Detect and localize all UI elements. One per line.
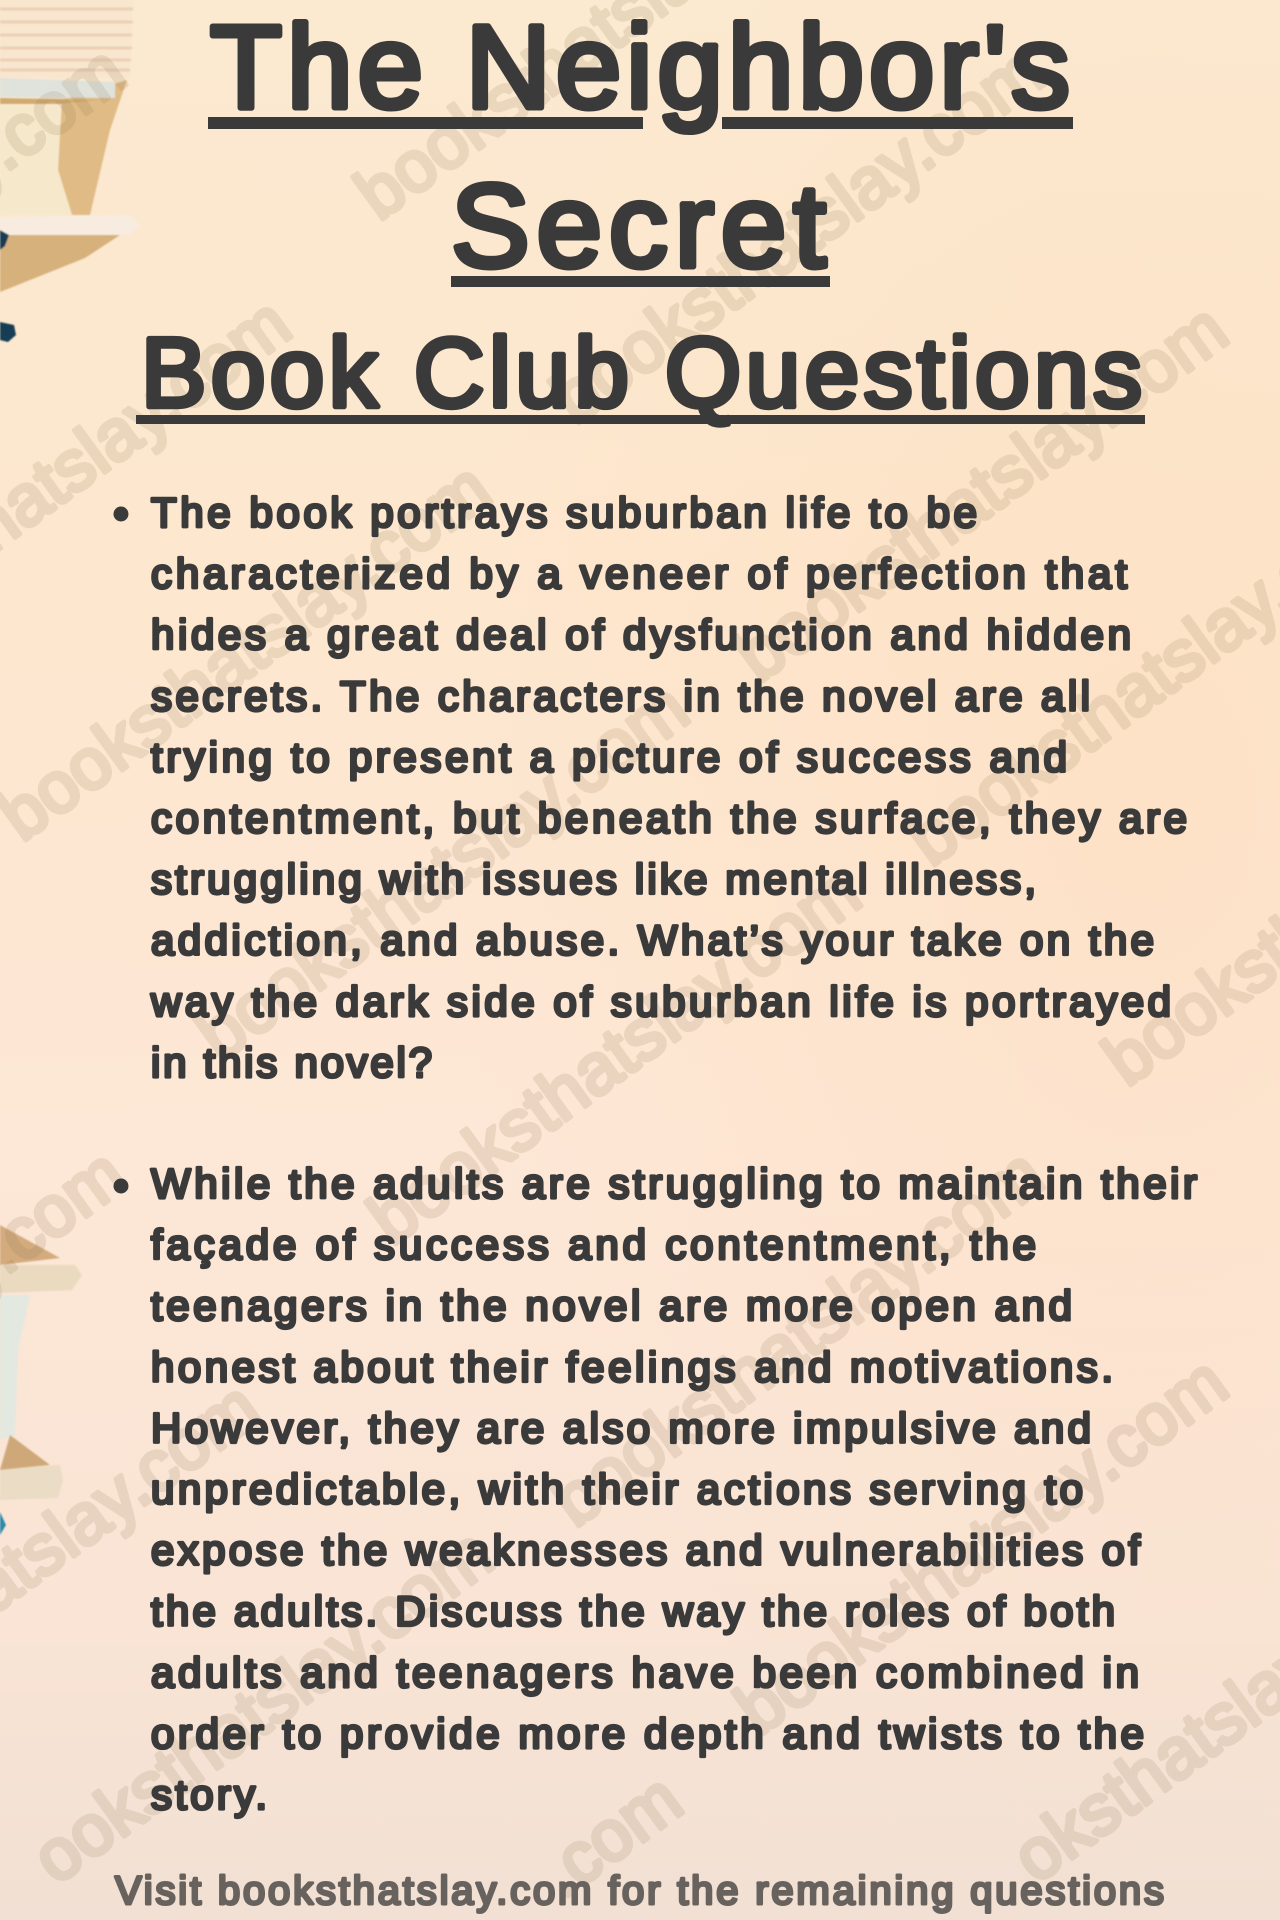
watermarks: booksthatslay.com (537, 1133, 1058, 1542)
question 2 text: unpredictable, with their actions serving to (151, 1466, 1083, 1512)
question 2 text: However, they are also more impulsive and (151, 1404, 1091, 1451)
watermarks: booksthatslay.com (721, 1341, 1242, 1750)
question 2 text: honest about their feelings and motivations. (151, 1343, 1113, 1390)
question 1 text: addiction, and abuse. What’s your take on the (151, 917, 1154, 964)
title (136, 2, 1145, 428)
question 2 text: story. (151, 1771, 267, 1818)
bullet 2 (114, 1178, 128, 1194)
question 2 text: façade of success and contentment, the (151, 1221, 1036, 1268)
question 1 text: secrets. The characters in the novel are all (151, 672, 1090, 719)
question 1 text (150, 489, 1187, 1086)
question 2 text: adults and teenagers have been combined in (151, 1649, 1139, 1696)
question 1 text: in this novel? (151, 1039, 432, 1086)
question 1 text: contentment, but beneath the surface, they are (151, 794, 1187, 842)
question 1 text: characterized by a veneer of perfection that (151, 550, 1127, 597)
decorative book stack, top left (0, 0, 140, 342)
question 2 text: teenagers in the novel are more open and (151, 1282, 1072, 1329)
bullet 1 (114, 506, 128, 522)
watermarks: booksthatslay.com (182, 667, 703, 1076)
watermarks: .com (525, 1758, 696, 1913)
watermarks: booksthatslay.com (537, 30, 1058, 439)
watermarks: booksthatslay.com (721, 288, 1242, 697)
decorative book stack, lower left (0, 1225, 82, 1535)
question 2 text: expose the weaknesses and vulnerabilities of (151, 1527, 1140, 1574)
question 2 text: While the adults are struggling to maintain their (151, 1160, 1197, 1207)
footer call to action: Visit booksthatslay.com for the remaining questions (115, 1869, 1164, 1913)
subtitle: Book Club Questions: Book Club Questions (141, 318, 1142, 428)
question 1 (114, 489, 1187, 1086)
title line: Secret: Secret (451, 160, 826, 292)
watermarks: booksthatslay.com (354, 851, 875, 1260)
question 1 text: struggling with issues like mental illness, (151, 856, 1036, 903)
watermarks: booksthatslay.com (0, 447, 505, 856)
question 1 text: way the dark side of suburban life is portrayed (150, 978, 1171, 1025)
question 1 text: hides a great deal of dysfunction and hidden (151, 611, 1131, 658)
question 2 (114, 1160, 1197, 1818)
question 2 text (151, 1160, 1197, 1818)
watermarks: ooksthatslay.com (18, 1513, 507, 1899)
question 2 text: order to provide more depth and twists to the (151, 1710, 1144, 1757)
question 1 text: trying to present a picture of success and (151, 733, 1067, 780)
question 1 text: The book portrays suburban life to be (151, 489, 977, 536)
question 2 text: the adults. Discuss the way the roles of both (151, 1588, 1115, 1635)
title line: The Neighbor's: The Neighbor's (210, 2, 1070, 134)
